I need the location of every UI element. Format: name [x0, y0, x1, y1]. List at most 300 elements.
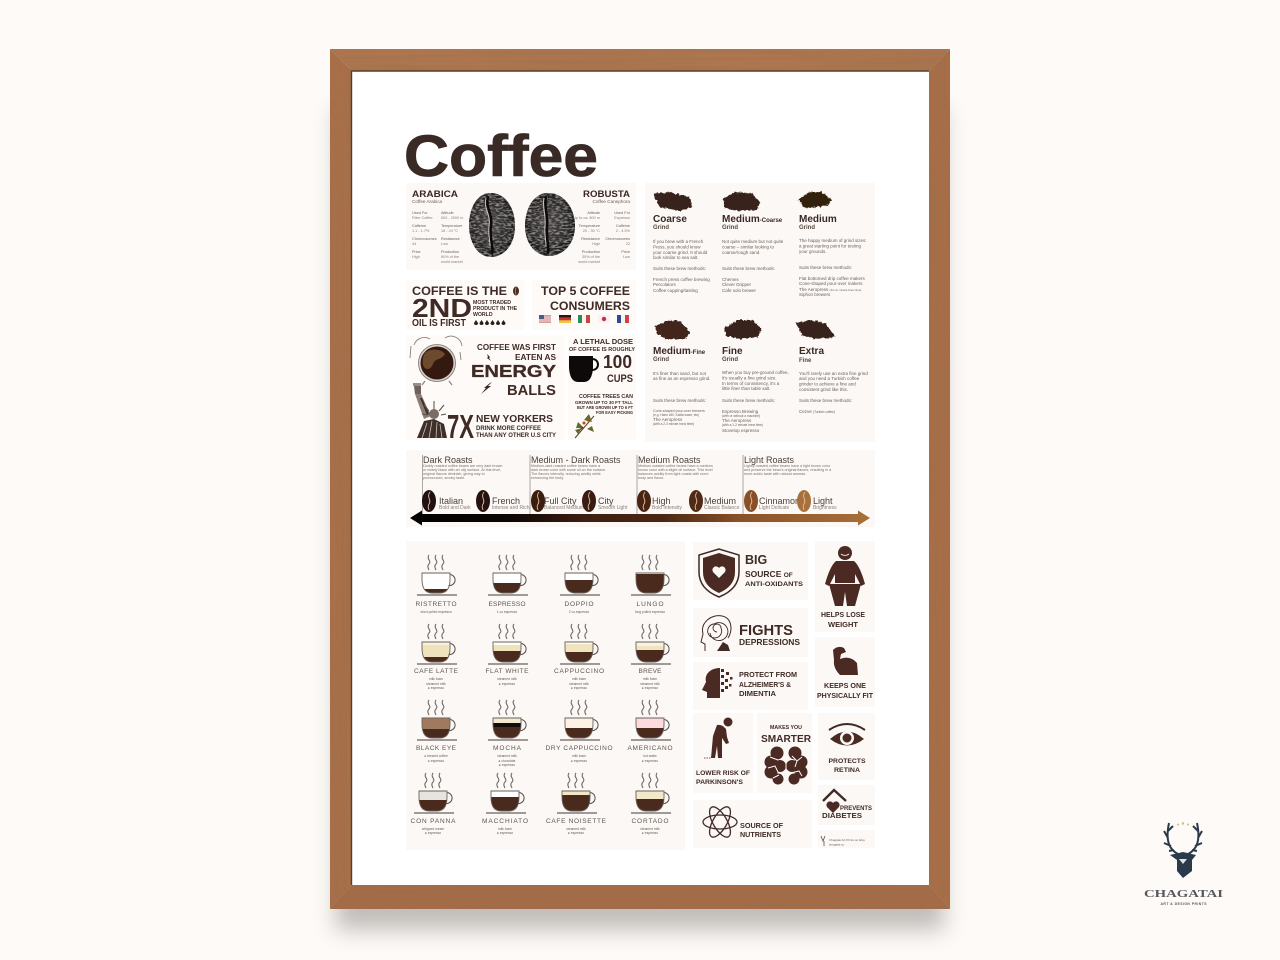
- roast: medium-dark: dark brown color with some oil on the surface.: [531, 468, 606, 472]
- panel: smarter: MAKES YOU: [770, 725, 802, 731]
- cup: cortado: CORTADO: [632, 818, 668, 825]
- roast: light: Light Delicate: [759, 505, 790, 511]
- panel: lethal dose: A LETHAL DOSE: [573, 337, 633, 346]
- panel: coffee drinks: [406, 541, 685, 850]
- cup: dry cappuccino: ● espresso: [571, 759, 587, 763]
- panel: energy balls and new yorkers: EATEN AS: [515, 352, 556, 362]
- robusta text: ROBUSTA: [583, 189, 630, 200]
- grind: fine: Stovetop espresso: [722, 428, 760, 433]
- panel: parkinsons: LOWER RISK OF: [696, 770, 750, 777]
- panel: grind sizes: [645, 183, 875, 442]
- panel: antioxidants: ANTI-OXIDANTS: [745, 581, 803, 588]
- robusta text: High: [592, 242, 600, 246]
- roast: medium: Bold Intensity: [652, 505, 683, 511]
- grind: coarse: French press coffee brewing: [653, 277, 710, 282]
- arabica text: 60% of the: [441, 255, 459, 259]
- arabica bean: [469, 193, 515, 257]
- grind: extra fine: and you need a Turkish coffee: [799, 376, 860, 381]
- icon: flexed arm: [833, 647, 858, 675]
- grind: fine: it's usually a fine grind size.: [722, 376, 777, 380]
- roast: light: Light Roasts: [744, 455, 795, 465]
- roast: medium-dark: Medium-dark roasted coffee beans have a: [531, 464, 601, 468]
- cup: flat white: [486, 624, 529, 686]
- cup: ristretto: RISTRETTO: [416, 601, 456, 608]
- grind: fine: Suits these brew methods:: [722, 398, 775, 403]
- cup: dry cappuccino: DRY CAPPUCCINO: [546, 745, 612, 752]
- cup: doppio: [560, 555, 600, 614]
- roast: medium: Medium: [704, 496, 736, 506]
- grind: medium-fine: Cone-shaped pour-over brewers: [653, 409, 705, 413]
- arabica text: 1.1 - 1.7%: [412, 229, 430, 233]
- roast: dark: [422, 455, 530, 514]
- grind: medium: Siphon brewers: [799, 292, 831, 297]
- grind: medium-coarse: Clever Dripper: [722, 282, 752, 287]
- cup: cappuccino: steamed milk: [569, 682, 589, 686]
- panel: coffee trees: BUT ARE GROWN UP TO 6 FT: [577, 405, 633, 410]
- roast: medium: [637, 455, 740, 514]
- panel: nutrients: NUTRIENTS: [740, 832, 781, 839]
- arabica text: Coffee Arabica: [412, 199, 442, 204]
- grind: medium: Cone-shaped pour-over makers: [799, 281, 863, 286]
- cup: dry cappuccino: milk foam: [572, 754, 586, 758]
- panel: parkinsons: [693, 713, 753, 793]
- grind: medium: Medium: [799, 214, 837, 225]
- roast: dark: original flavors diminish, giving way to: [423, 472, 485, 476]
- panel: nutrients: SOURCE OF: [740, 823, 784, 830]
- panel: energy balls and new yorkers: 7X: [447, 408, 474, 445]
- cup: cortado: ● espresso: [642, 831, 658, 835]
- robusta text: Caffeine: [616, 224, 630, 228]
- icon: person with loose trousers: [825, 546, 865, 606]
- panel: second most traded: OIL IS FIRST: [412, 318, 466, 329]
- robusta bean: [525, 193, 575, 256]
- grind: medium-fine: The Aeropress: [653, 417, 683, 422]
- grind: medium: [798, 192, 867, 297]
- cup: cafe noisette: CAFE NOISETTE: [546, 818, 607, 825]
- grind: medium: a great starting point for testing: [799, 244, 862, 248]
- icon: lightning bolts: [481, 354, 492, 394]
- grind: extra fine: [796, 320, 868, 414]
- roast: dark: Bold and Dark: [439, 505, 471, 511]
- panel: coffee trees: FOR EASY PICKING: [596, 410, 633, 415]
- grind: coarse: [653, 192, 710, 293]
- cup: doppio: 2 oz espresso: [569, 610, 589, 614]
- grind: fine: Espresso Brewing: [722, 409, 759, 414]
- grind: fine: (with or without a machine): [722, 414, 760, 418]
- cup: americano: AMERICANO: [628, 745, 672, 752]
- cup: cappuccino: milk foam: [572, 677, 586, 681]
- grind: medium: Suits these brew methods:: [799, 265, 852, 270]
- arabica text: 44: [412, 242, 416, 246]
- panel: second most traded: 2ND: [412, 293, 472, 323]
- cup: americano: hot water: [643, 754, 658, 758]
- grind: medium-fine: (with a 2-3 minute brew time): [653, 422, 694, 426]
- arabica text: 16 - 24 °C: [441, 229, 458, 233]
- robusta text: Chromosomes: [605, 237, 630, 241]
- panel: energy balls and new yorkers: DRINK MORE COFFEE: [476, 425, 541, 432]
- cup: flat white: steamed milk: [497, 677, 517, 681]
- roast: medium-dark: enhancing the body.: [531, 476, 564, 480]
- panel: lethal dose: 100: [603, 352, 632, 372]
- cup: flat white: FLAT WHITE: [486, 668, 529, 675]
- roast: medium: Medium roasted coffee beans have a medium: [638, 464, 713, 468]
- panel: energy balls and new yorkers: THAN ANY OTHER U.S CITY: [476, 432, 557, 439]
- roast: light: more acidic taste with natural aromas.: [744, 472, 806, 476]
- robusta text: Altitude: [587, 211, 600, 215]
- grind: extra fine: consistent grind like this.: [799, 387, 848, 392]
- grind: medium: Grind: [799, 225, 815, 231]
- arabica text: 600 - 2000 m: [441, 216, 463, 220]
- grind: medium-coarse: coarse/rough sand.: [722, 250, 761, 255]
- grind: coarse: If you brew with a French: [653, 239, 704, 244]
- grind: medium-fine: Grind: [653, 357, 669, 363]
- panel: smarter: SMARTER: [761, 734, 812, 745]
- panel: lose weight: HELPS LOSE: [821, 612, 865, 619]
- cup: cappuccino: [554, 624, 604, 690]
- cup: macchiato: [482, 773, 528, 835]
- panel: coffee trees: GROWN UP TO 30 FT TALL: [575, 400, 633, 405]
- logo: chagatai deer: [1144, 822, 1223, 906]
- robusta text: Low: [623, 255, 630, 259]
- grind: medium-coarse: coarse – similar looking to: [722, 244, 775, 250]
- cup: black eye: ● espresso: [428, 759, 444, 763]
- cup: macchiato: ● espresso: [497, 831, 513, 835]
- cup: espresso: [488, 555, 528, 614]
- title: Coffee: [404, 124, 598, 189]
- roast: dark: Dark Roasts: [423, 455, 473, 465]
- cup: cafe latte: ● espresso: [428, 686, 444, 690]
- panel: top 5 consumers: CONSUMERS: [550, 299, 630, 313]
- icon: black cup: [569, 356, 598, 382]
- grind: medium: The happy medium of grind sizes:: [799, 238, 867, 243]
- panel: retina: PROTECTS: [828, 758, 866, 765]
- roast: medium-dark: The flavors intensify, reducing acidity while: [531, 472, 601, 476]
- roast: light: Lightly roasted coffee beans have a light brown color: [744, 464, 831, 468]
- cup: espresso: 1 oz espresso: [497, 610, 517, 614]
- panel: retina: [818, 713, 875, 780]
- robusta text: Production: [582, 250, 600, 254]
- roast: medium-dark: Medium - Dark Roasts: [531, 455, 621, 465]
- roast: dark: French: [492, 496, 520, 506]
- cup: americano: [628, 700, 672, 763]
- roast: medium: Classic Balance: [704, 505, 740, 511]
- icon: small bean: [513, 286, 519, 296]
- cup: con panna: [410, 773, 456, 835]
- robusta text: 2 - 4.5%: [616, 229, 631, 233]
- panel: lethal dose: CUPS: [607, 373, 633, 385]
- panel: diabetes: [818, 785, 875, 825]
- grind: fine: When you buy pre-ground coffee,: [722, 370, 789, 375]
- panel: coffee trees: COFFEE TREES CAN: [579, 394, 633, 400]
- panel: alzheimers: PROTECT FROM: [739, 672, 797, 679]
- grind: coarse: Coarse: [653, 214, 687, 225]
- roast: light: and preserve the bean's original flavors, resulting in a: [744, 468, 832, 472]
- roast: medium: Medium Roasts: [638, 455, 701, 465]
- grind: fine: Fine: [722, 346, 743, 357]
- cup: cortado: [631, 773, 671, 835]
- panel: smarter: [757, 713, 812, 793]
- cup: dry cappuccino: [546, 700, 612, 763]
- grind: extra fine: Cezve (Turkish coffee): [799, 409, 835, 414]
- grind: fine: The Aeropress: [722, 418, 752, 423]
- credit note: Chagatai Art Prints on Etsy: [829, 838, 865, 842]
- grind: extra fine: Fine: [799, 358, 812, 364]
- arabica text: High: [412, 255, 420, 259]
- grind: coarse: Percolators: [653, 282, 677, 287]
- arabica text: Production: [441, 250, 459, 254]
- roast: medium-dark: City: [598, 496, 614, 506]
- grind: medium-coarse: Not quite medium but not quite: [722, 239, 784, 244]
- panel: diabetes: DIABETES: [822, 811, 862, 820]
- roast: medium: body and flavor.: [638, 476, 664, 480]
- panel: depressions: FIGHTS: [739, 623, 793, 639]
- panel: energy balls and new yorkers: NEW YORKERS: [476, 414, 553, 425]
- grind: medium-fine: [653, 320, 711, 426]
- icon: statue of liberty: [413, 383, 447, 438]
- grind: coarse: Coffee cupping/tasting: [653, 288, 698, 293]
- grind: medium: Flat bottomed drip coffee makers: [799, 276, 865, 281]
- roast: medium: balances acidity from light roasts with more: [638, 472, 709, 476]
- icon: head with spiral: [701, 616, 731, 651]
- cup: mocha: [488, 700, 528, 767]
- arabica text: Used For: [412, 211, 428, 215]
- panel: arabica vs robusta: [406, 183, 636, 270]
- panel: second most traded: [406, 280, 525, 330]
- cup: ristretto: short pulled espresso: [420, 610, 452, 614]
- robusta text: Used For: [614, 211, 631, 215]
- roast: light: Light: [813, 496, 833, 506]
- arabica text: Altitude: [441, 211, 454, 215]
- credit note: chagatai.co: [829, 842, 845, 846]
- panel: depressions: [693, 608, 808, 657]
- flags: [539, 315, 629, 323]
- roast: medium: High: [652, 496, 671, 506]
- panel: energy balls and new yorkers: BALLS: [507, 383, 556, 399]
- arabica text: Resistance: [441, 237, 460, 241]
- panel: second most traded: MOST TRADED: [473, 300, 511, 306]
- roast: dark: pronounced, smoky taste.: [423, 476, 465, 480]
- cup: black eye: ● brewed coffee: [424, 754, 448, 758]
- cup: cafe noisette: steamed milk: [566, 827, 586, 831]
- panel: lethal dose: [568, 335, 636, 395]
- roast: dark: Italian: [439, 496, 463, 506]
- cup: con panna: whipped cream: [422, 827, 444, 831]
- panel: lose weight: WEIGHT: [828, 622, 859, 629]
- panel: physically fit: PHYSICALLY FIT: [817, 693, 874, 700]
- robusta text: 30% of the: [582, 255, 600, 259]
- grind: medium-fine: as fine as an espresso grind.: [653, 376, 711, 381]
- robusta text: 20 - 30 °C: [583, 229, 600, 233]
- grind: fine: [722, 320, 789, 433]
- grind: medium: your grounds.: [799, 249, 827, 254]
- cup: breve: ● espresso: [642, 686, 658, 690]
- grind: fine: (with a 1-2 minute brew time): [722, 423, 763, 427]
- robusta text: Coffee Canephora: [593, 199, 630, 204]
- grind: coarse: Grind: [653, 225, 669, 231]
- arabica text: Low: [441, 242, 448, 246]
- cup: mocha: MOCHA: [493, 745, 522, 752]
- icon: dissolving head: [702, 668, 732, 698]
- grind: extra fine: Suits these brew methods:: [799, 398, 852, 403]
- robusta text: [573, 189, 631, 264]
- robusta text: Price: [621, 250, 630, 254]
- cup: lungo: LUNGO: [636, 601, 664, 608]
- panel: physically fit: KEEPS ONE: [824, 683, 866, 690]
- roast: light: Cinnamon: [759, 496, 800, 506]
- cup: doppio: DOPPIO: [564, 601, 594, 608]
- cup: breve: [631, 624, 671, 690]
- grind: coarse: Suits these brew methods:: [653, 266, 706, 271]
- cup: cortado: steamed milk: [640, 827, 660, 831]
- icon: brain: [764, 746, 808, 786]
- panel: antioxidants: SOURCE OF: [745, 569, 793, 579]
- robusta text: Espresso: [614, 216, 630, 220]
- cup: cafe noisette: [546, 773, 607, 835]
- cup: black eye: [416, 700, 457, 763]
- roast: dark: Intense and Rich: [492, 505, 530, 511]
- cup: macchiato: milk foam: [498, 827, 512, 831]
- grind: coarse: your coarse grind. It should: [653, 250, 708, 255]
- roast: medium: brown color with a slight oil surface. This level: [638, 468, 713, 472]
- robusta text: Resistance: [581, 237, 600, 241]
- roast: light: [743, 455, 837, 514]
- grind: medium-coarse: Chemex: [722, 277, 740, 282]
- panel: top 5 consumers: TOP 5 COFFEE: [541, 284, 630, 298]
- credit note: [818, 830, 875, 848]
- robusta text: world market: [578, 260, 601, 264]
- cup: con panna: CON PANNA: [410, 818, 456, 825]
- grind: fine: little finer than table salt.: [722, 386, 771, 391]
- grind: medium-fine: Medium-Fine: [653, 346, 706, 357]
- panel: alzheimers: ALZHEIMER'S &: [739, 682, 791, 689]
- cup: cafe latte: milk foam: [429, 677, 443, 681]
- panel: energy balls and new yorkers: [406, 335, 565, 445]
- panel: depressions: DEPRESSIONS: [739, 638, 801, 647]
- roast: medium-dark: Balanced Medium: [544, 505, 584, 511]
- icon: deer head: [1164, 823, 1202, 878]
- icon: coffee branch: [575, 414, 594, 438]
- panel: coffee trees: [568, 394, 636, 440]
- grind: medium-fine: (e.g. Hario v60, Kalita wave, etc): [653, 413, 699, 417]
- arabica text: Filter Coffee: [412, 216, 433, 220]
- cup: breve: steamed milk: [640, 682, 660, 686]
- arrow: dark to light gradient: [410, 510, 870, 526]
- panel: antioxidants: BIG: [745, 553, 767, 567]
- arabica text: Temperature: [441, 224, 462, 228]
- arabica text: [412, 189, 464, 264]
- grind: coarse: Press, you should know: [653, 244, 701, 250]
- panel: second most traded: PRODUCT IN THE: [473, 306, 518, 312]
- arabica text: Chromosomes: [412, 237, 437, 241]
- cup: ristretto: [416, 555, 457, 614]
- panel: lethal dose: OF COFFEE IS ROUGHLY: [569, 347, 636, 353]
- roast: medium-dark: Smooth Light: [598, 505, 628, 511]
- grind: extra fine: You'll rarely use an extra fine grind: [799, 371, 868, 376]
- cup: cappuccino: CAPPUCCINO: [554, 668, 604, 675]
- panel: lose weight: [815, 541, 875, 632]
- grind: coarse: look similar to sea salt.: [653, 255, 699, 260]
- grind: medium: The Aeropress (3m 3+ minute brew time): [799, 287, 861, 292]
- grind: medium-coarse: Medium-Coarse: [722, 214, 783, 225]
- roast: dark: Darkly roasted coffee beans are very dark brown: [423, 464, 502, 468]
- panel: alzheimers: [693, 662, 808, 710]
- panel: second most traded: WORLD: [473, 312, 493, 318]
- logo: chagatai deer: CHAGATAI: [1144, 888, 1223, 900]
- cup: americano: ● espresso: [642, 759, 658, 763]
- cup: con panna: ● espresso: [425, 831, 441, 835]
- panel: retina: RETINA: [834, 767, 860, 774]
- grind: fine: In terms of consistency, it's a: [722, 381, 780, 386]
- panel: antioxidants: [693, 542, 808, 600]
- arabica text: Price: [412, 250, 421, 254]
- grind: medium-coarse: Cafe solo brewer: [722, 288, 757, 293]
- cup: mocha: steamed milk: [497, 754, 517, 758]
- cup: mocha: ● espresso: [499, 763, 515, 767]
- icon: stars: [1177, 822, 1189, 826]
- panel: physically fit: [815, 637, 875, 707]
- cup: espresso: ESPRESSO: [488, 601, 526, 608]
- cup: cafe latte: CAFE LATTE: [414, 668, 459, 675]
- roast: light: Brightness: [813, 505, 837, 511]
- icon: alarm clock coffee: [410, 336, 462, 385]
- logo: chagatai deer: ART & DESIGN PRINTS: [1160, 902, 1207, 906]
- cup: cafe latte: steamed milk: [426, 682, 446, 686]
- roast: medium-dark: Full City: [544, 496, 577, 506]
- panel: nutrients: [693, 800, 812, 848]
- roast: medium-dark: [530, 455, 628, 514]
- icon: shield with heart: [699, 549, 739, 597]
- panel: top 5 consumers: [532, 280, 636, 330]
- robusta text: 22: [626, 242, 630, 246]
- cup: macchiato: MACCHIATO: [482, 818, 528, 825]
- panel: alzheimers: DIMENTIA: [739, 691, 776, 698]
- icon: oil drops: [474, 320, 506, 325]
- panel: energy balls and new yorkers: COFFEE WAS FIRST: [477, 342, 557, 352]
- robusta text: Temperature: [579, 224, 600, 228]
- cup: black eye: BLACK EYE: [416, 745, 457, 752]
- icon: eye: [829, 724, 865, 746]
- roast: dark: or nearly black with an oily surface. At this level,: [423, 468, 501, 472]
- grind: extra fine: Extra: [799, 346, 824, 357]
- arabica text: ARABICA: [412, 189, 458, 200]
- cup: flat white: ● espresso: [499, 682, 515, 686]
- cup: cappuccino: ● espresso: [571, 686, 587, 690]
- grind: medium-fine: Suits these brew methods:: [653, 398, 706, 403]
- panel: roast scale: [406, 450, 875, 527]
- cup: mocha: ● chocolate: [498, 759, 516, 763]
- grind: medium-coarse: [722, 192, 784, 293]
- framed poster: [330, 49, 950, 930]
- arabica text: world market: [441, 260, 464, 264]
- cup: cafe noisette: ● espresso: [568, 831, 584, 835]
- icon: stooped person: [704, 718, 732, 758]
- cup: breve: BREVE: [638, 668, 662, 675]
- icon: atom: [703, 804, 737, 840]
- grind: medium-fine: It's finer than sand, but not: [653, 371, 707, 376]
- panel: diabetes: PREVENTS: [840, 806, 872, 812]
- icon: house with heart: [823, 790, 846, 813]
- panel: second most traded: COFFEE IS THE: [412, 284, 507, 298]
- panel: energy balls and new yorkers: ENERGY: [471, 361, 556, 381]
- cup: lungo: long pulled espresso: [635, 610, 665, 614]
- grind: medium-coarse: Grind: [722, 225, 738, 231]
- grind: extra fine: grinder to achieve a fine and: [799, 382, 856, 386]
- arabica text: Caffeine: [412, 224, 426, 228]
- panel: parkinsons: PARKINSON'S: [696, 779, 743, 786]
- cup: cafe latte: [414, 624, 459, 690]
- cup: breve: milk foam: [643, 677, 657, 681]
- grind: medium-coarse: Suits these brew methods:: [722, 266, 775, 271]
